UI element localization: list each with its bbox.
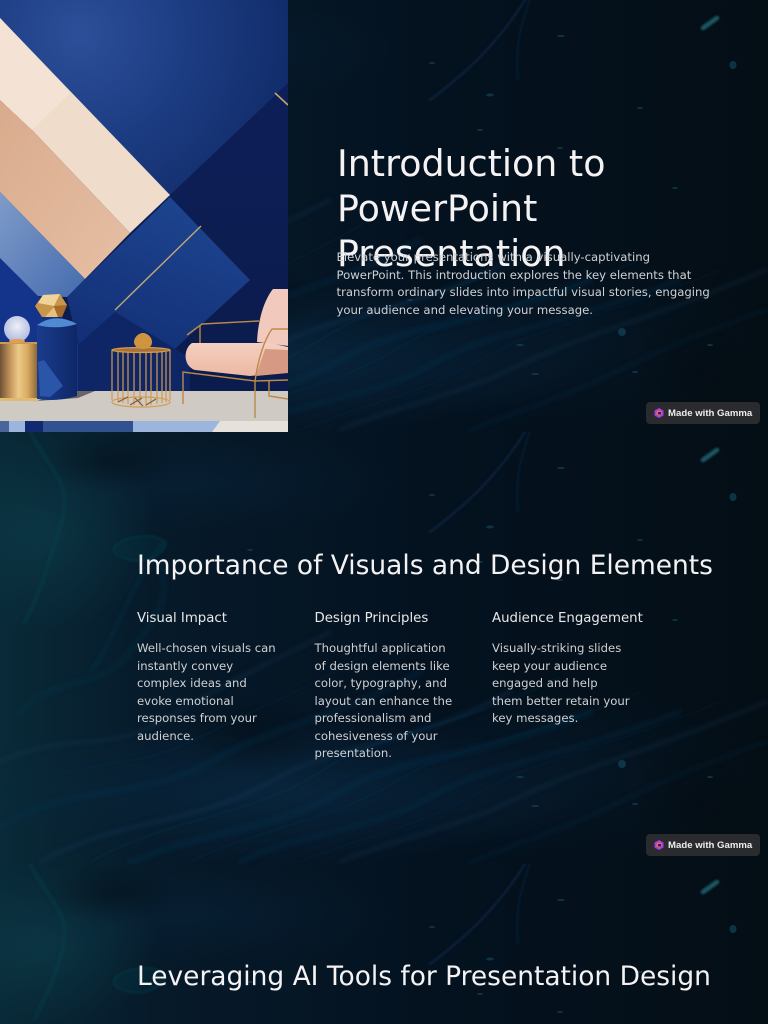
- column text: [492, 641, 630, 725]
- intro paragraph: PowerPoint. This introduction explores the key elements that: [336, 268, 691, 282]
- chair frame: [183, 321, 288, 418]
- gold pedestal: [0, 342, 37, 401]
- column text: evoke emotional: [137, 694, 234, 708]
- slide background: bottom: [0, 864, 736, 1024]
- orb: [4, 316, 30, 343]
- slide background: middle: [0, 432, 736, 864]
- column text: audience.: [137, 728, 194, 742]
- image: interior with geometric wall and chair: [0, 0, 288, 432]
- column text: Thoughtful application: [314, 641, 446, 655]
- badge: made with gamma: Made with Gamma: [668, 840, 752, 850]
- title: PowerPoint: [337, 187, 537, 230]
- column text: of design elements like: [314, 658, 450, 672]
- column text: professionalism and: [314, 711, 431, 725]
- floor: [0, 391, 288, 421]
- navy wedge: [60, 83, 288, 395]
- column text: them better retain your: [492, 694, 630, 708]
- column: audience engagement: [492, 611, 643, 725]
- column heading: Visual Impact: [137, 611, 227, 626]
- column text: cohesiveness of your: [314, 728, 438, 742]
- gold lines: [115, 226, 201, 310]
- column text: keep your audience: [492, 658, 607, 672]
- blue lower left: [0, 258, 78, 395]
- intro paragraph: Elevate your presentations with a visually-captivating: [336, 250, 650, 264]
- column heading: Design Principles: [314, 611, 428, 626]
- column text: layout can enhance the: [314, 694, 452, 708]
- column: visual impact: [137, 611, 276, 742]
- section heading: importance: Importance of Visuals and Design Elements: [137, 550, 713, 581]
- column text: Well-chosen visuals can: [137, 641, 276, 655]
- column text: complex ideas and: [137, 676, 247, 690]
- peach band: [0, 100, 130, 279]
- floor shadow: [30, 391, 95, 403]
- section heading: AI tools: Leveraging AI Tools for Presentation Design: [137, 961, 711, 992]
- column text: [314, 641, 452, 760]
- column heading: Audience Engagement: [492, 611, 643, 626]
- column text: instantly convey: [137, 658, 233, 672]
- badge: made with gamma: Made with Gamma: [668, 408, 752, 418]
- title: Introduction to: [337, 142, 605, 185]
- column text: engaged and help: [492, 676, 598, 690]
- column text: color, typography, and: [314, 676, 447, 690]
- column text: responses from your: [137, 711, 257, 725]
- title: Presentation: [337, 232, 566, 275]
- gold vase: [134, 333, 152, 349]
- column text: presentation.: [314, 746, 392, 760]
- column text: Visually-striking slides: [492, 641, 621, 655]
- intro paragraph: transform ordinary slides into impactful visual stories, engaging: [336, 285, 710, 299]
- wire side table: [112, 348, 170, 407]
- intro paragraph: your audience and elevating your message.: [336, 302, 593, 316]
- cream band top tone: [0, 18, 70, 130]
- chair back: [257, 289, 288, 346]
- badge: made with gamma: [646, 834, 760, 856]
- wall: [0, 0, 288, 432]
- cream band: [0, 18, 170, 233]
- intro paragraph: [336, 250, 710, 316]
- lower dark facet: [78, 312, 190, 395]
- badge: made with gamma: [646, 402, 760, 424]
- column text: key messages.: [492, 711, 578, 725]
- title: [337, 142, 605, 275]
- blue cylinder: [37, 318, 77, 400]
- slide background: top: [288, 0, 736, 432]
- gold gem: [35, 294, 67, 317]
- pink chair: [183, 289, 288, 418]
- column: design principles: [314, 611, 452, 760]
- blue diamond: [67, 197, 250, 358]
- light blue band: [0, 192, 85, 297]
- rug: [0, 421, 288, 432]
- column text: [137, 641, 276, 742]
- chair seat: [186, 343, 288, 376]
